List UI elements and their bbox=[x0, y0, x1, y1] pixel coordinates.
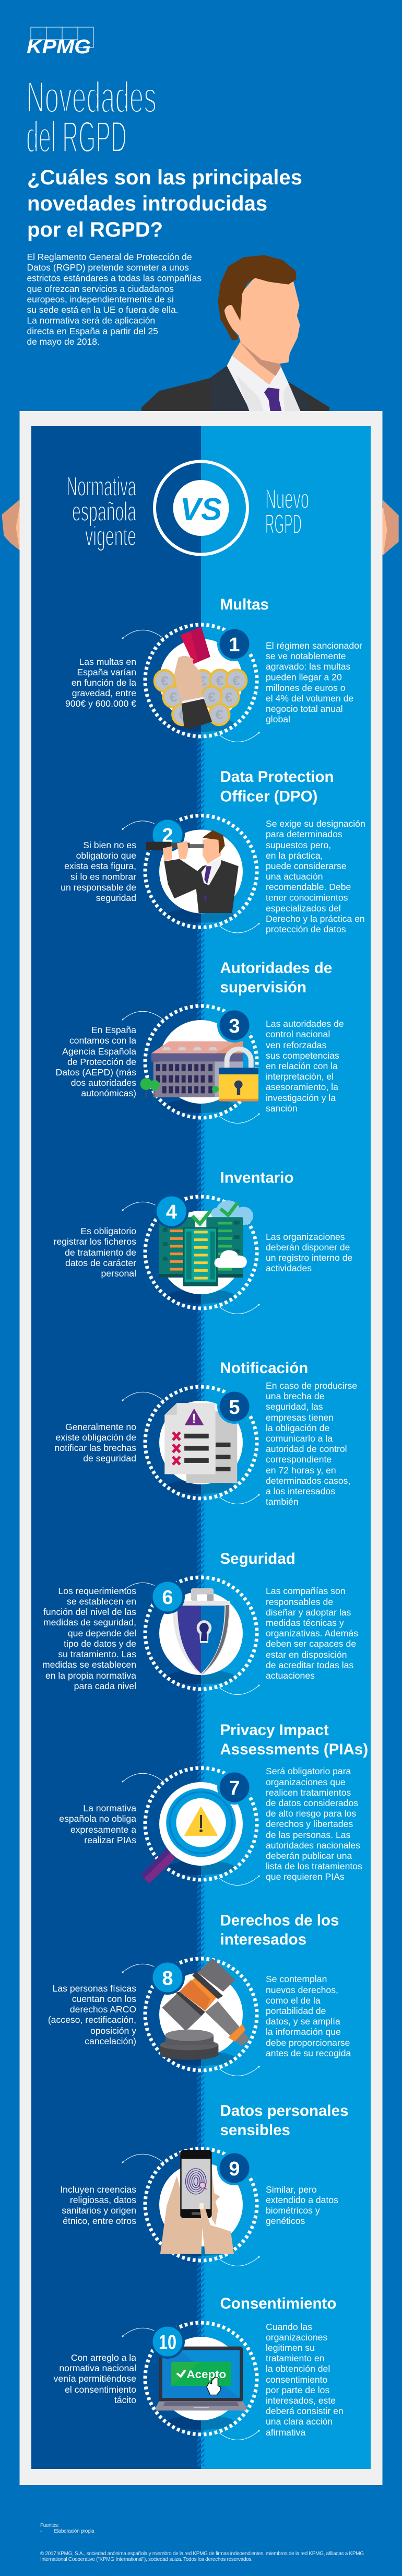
heading: Normativa española vigente: española bbox=[72, 497, 136, 527]
right text: pueden llegar a 20 bbox=[266, 672, 342, 682]
badge 3: 3 bbox=[229, 1015, 240, 1037]
left text: contamos con la bbox=[69, 1035, 136, 1046]
heading: Privacy Impact bbox=[220, 1722, 329, 1739]
heading: Normativa española vigente: vigente bbox=[85, 521, 136, 552]
KPMG logo: KPMG bbox=[27, 36, 91, 58]
section 2: Data Protection Officer bbox=[61, 768, 365, 934]
heading: Data Protection bbox=[220, 768, 334, 786]
right text: la información que bbox=[266, 2027, 341, 2037]
right text: deberán disponer de bbox=[266, 1242, 350, 1252]
intro paragraph: su sede está en la UE o fuera de ella. bbox=[27, 305, 179, 315]
right text: organizaciones que bbox=[266, 1777, 346, 1787]
footer: copyright: © 2017 KPMG, S.A., sociedad anónima española y miembro de la red KPMG de firmas independientes, miembros de la red KPMG, afiliadas a KPMG bbox=[40, 2551, 364, 2557]
right text: una actuación bbox=[266, 871, 323, 882]
heading: Notificación bbox=[220, 1360, 308, 1377]
right text: de acreditar todas las bbox=[266, 1660, 353, 1670]
right text: empresas tienen bbox=[266, 1412, 334, 1423]
left text bbox=[54, 1226, 136, 1279]
right text: el 4% del volumen de bbox=[266, 693, 353, 704]
badge 7 bbox=[217, 1770, 252, 1805]
section 6: Seguridad bbox=[42, 1550, 358, 1695]
left text: La normativa bbox=[83, 1803, 136, 1813]
right text: deben ser capaces de bbox=[266, 1638, 356, 1649]
left text bbox=[65, 657, 136, 709]
right text: un registro interno de bbox=[266, 1252, 352, 1263]
left text: de Protección de bbox=[67, 1057, 136, 1067]
left text bbox=[60, 2184, 136, 2226]
left text: autonómicas) bbox=[81, 1088, 136, 1098]
icon: building and padlock bbox=[140, 1041, 258, 1101]
badge 2: 2 bbox=[162, 825, 173, 847]
right text: interesados, este bbox=[266, 2395, 336, 2406]
intro paragraph: que ofrezcan servicios a ciudadanos bbox=[27, 284, 174, 294]
title: Novedades del RGPD: del RGPD bbox=[26, 112, 127, 161]
heading: sensibles bbox=[220, 2122, 290, 2139]
left text: Las personas físicas bbox=[53, 1983, 136, 1994]
footer: sources: Elaboración propia bbox=[54, 2528, 94, 2534]
left text: dos autoridades bbox=[71, 1078, 136, 1088]
badge 10: 10 bbox=[159, 2332, 176, 2353]
left text: tipo de datos y de bbox=[64, 1638, 136, 1649]
panel: comparison board bbox=[20, 411, 382, 2485]
intro paragraph bbox=[27, 252, 202, 347]
right text: millones de euros o bbox=[266, 683, 346, 693]
badge 5: 5 bbox=[229, 1397, 240, 1419]
left text: función del nivel de las bbox=[43, 1607, 136, 1617]
right text: sanción bbox=[266, 1103, 298, 1114]
left text: Si bien no es bbox=[83, 840, 136, 850]
right text: de las personas. Las bbox=[266, 1830, 351, 1840]
intro paragraph: El Reglamento General de Protección de bbox=[27, 252, 192, 262]
badge 1 bbox=[217, 627, 252, 661]
left text: Generalmente no bbox=[65, 1422, 136, 1432]
section 1: Multas bbox=[65, 596, 362, 742]
right text: En caso de producirse bbox=[266, 1380, 357, 1391]
right text: organizativas. Además bbox=[266, 1628, 358, 1638]
left text: que depende del bbox=[68, 1628, 136, 1638]
right text: puede considerarse bbox=[266, 861, 347, 871]
icon: documents with warning bbox=[164, 1403, 237, 1483]
left text: datos de carácter bbox=[65, 1258, 136, 1268]
left text: medidas se establecen bbox=[42, 1659, 136, 1670]
right text: ven reforzadas bbox=[266, 1040, 327, 1050]
left text: Con arreglo a la bbox=[71, 2352, 136, 2363]
right text: tratamiento en bbox=[266, 2353, 324, 2363]
right text: en 72 horas y, en bbox=[266, 1465, 336, 1476]
right text bbox=[266, 1018, 344, 1114]
right text bbox=[266, 1586, 358, 1681]
right text bbox=[266, 640, 362, 724]
left text bbox=[48, 1983, 136, 2046]
left text: oposición y bbox=[90, 2025, 136, 2036]
heading: Nuevo RGPD bbox=[265, 484, 309, 540]
icon: magnifier with warning bbox=[140, 1788, 236, 1883]
right text: en relación con la bbox=[266, 1061, 338, 1071]
right text: derechos y libertades bbox=[266, 1819, 353, 1829]
left text: Las multas en bbox=[79, 657, 136, 667]
right text: una brecha de bbox=[266, 1391, 325, 1401]
section 9: Datos personales sensibles bbox=[60, 2102, 348, 2266]
footer: copyright bbox=[40, 2551, 364, 2562]
right text: negocio total anual bbox=[266, 704, 343, 714]
section 3: Autoridades de supervisión bbox=[56, 959, 344, 1123]
right text: deberán publicar una bbox=[266, 1851, 352, 1861]
intro paragraph: estrictos estándares a todas las compañías bbox=[27, 273, 202, 283]
right text: portabilidad de bbox=[266, 2006, 326, 2016]
right text: recomendable. Debe bbox=[266, 882, 351, 892]
icon: phone with fingerprint bbox=[160, 2150, 234, 2254]
left text bbox=[42, 1586, 136, 1691]
title: Novedades del RGPD bbox=[26, 73, 157, 161]
left text: tácito bbox=[114, 2395, 136, 2405]
badge 10 bbox=[150, 2324, 185, 2359]
heading: Datos personales bbox=[220, 2102, 348, 2120]
badge 2 bbox=[150, 817, 185, 852]
right text: sus competencias bbox=[266, 1050, 339, 1061]
badge 5 bbox=[217, 1389, 252, 1424]
right text: investigación y la bbox=[266, 1093, 336, 1103]
left text: Los requerimientos bbox=[58, 1586, 136, 1596]
right text: Se contemplan bbox=[266, 1974, 327, 1984]
footer: sources bbox=[40, 2523, 94, 2534]
right text bbox=[266, 818, 365, 934]
left text: de tratamiento de bbox=[65, 1247, 136, 1258]
right text: medidas técnicas y bbox=[266, 1618, 344, 1628]
left text: Es obligatorio bbox=[80, 1226, 136, 1236]
right text: correspondiente bbox=[266, 1454, 332, 1465]
left text bbox=[54, 2352, 136, 2405]
heading: Nuevo RGPD: RGPD bbox=[265, 509, 302, 540]
left text: normativa nacional bbox=[59, 2363, 136, 2373]
intro paragraph: Datos (RGPD) pretende someter a unos bbox=[27, 262, 189, 273]
right text: también bbox=[266, 1496, 299, 1507]
left text: para cada nivel bbox=[74, 1681, 136, 1691]
left text: cancelación) bbox=[85, 2036, 136, 2046]
footer: sources: - bbox=[40, 2528, 42, 2534]
heading: Officer (DPO) bbox=[220, 788, 317, 805]
subtitle question: por el RGPD? bbox=[27, 218, 163, 241]
left text: de seguridad bbox=[83, 1453, 136, 1463]
icon: shield with keyhole bbox=[172, 1588, 230, 1676]
left text: un responsable de bbox=[61, 882, 136, 893]
right text: debe proporcionarse bbox=[266, 2038, 350, 2048]
right text: que requieren PIAs bbox=[266, 1871, 345, 1882]
right text: diseñar y adoptar las bbox=[266, 1607, 351, 1618]
right text: antes de su recogida bbox=[266, 2048, 351, 2058]
left text: existe obligación de bbox=[55, 1432, 136, 1443]
right text: control nacional bbox=[266, 1029, 330, 1039]
footer: sources: Fuentes: bbox=[40, 2523, 59, 2528]
right text: Las organizaciones bbox=[266, 1232, 345, 1242]
left text: sí lo es nombrar bbox=[70, 871, 136, 882]
right text: especializados del bbox=[266, 903, 341, 914]
intro paragraph: La normativa será de aplicación bbox=[27, 315, 155, 326]
right text: responsables de bbox=[266, 1597, 333, 1607]
footer: copyright: International Cooperative ("KPMG International"), sociedad suiza. Todos los derechos reservados. bbox=[40, 2557, 253, 2562]
right text bbox=[266, 2184, 338, 2226]
left text: religiosas, datos bbox=[70, 2195, 136, 2205]
right text: Las compañías son bbox=[266, 1586, 346, 1596]
badge 7: 7 bbox=[229, 1777, 240, 1799]
left text: cuentan con los bbox=[72, 1994, 136, 2004]
left text: obligatorio que bbox=[76, 850, 136, 861]
right text bbox=[266, 2322, 344, 2438]
left text: sanitarios y origen bbox=[62, 2205, 136, 2216]
left text: expresamente a bbox=[70, 1824, 136, 1835]
heading: Consentimiento bbox=[220, 2295, 336, 2312]
heading: interesados bbox=[220, 1931, 306, 1948]
section 7: Privacy Impact Assessments bbox=[59, 1722, 368, 1886]
subtitle question bbox=[27, 166, 302, 241]
badge 9 bbox=[217, 2151, 252, 2185]
right text: de datos considerados bbox=[266, 1798, 358, 1808]
icon: laptop with accept button bbox=[156, 2347, 246, 2410]
left text bbox=[55, 1422, 136, 1463]
right text bbox=[266, 1766, 362, 1882]
right text: Se exige su designación bbox=[266, 818, 365, 829]
left text: realizar PIAs bbox=[84, 1835, 136, 1845]
title: Novedades del RGPD: Novedades bbox=[26, 73, 157, 122]
section 10: Consentimiento bbox=[54, 2295, 344, 2440]
right text: la obtención del bbox=[266, 2363, 330, 2374]
illustration: businessman bbox=[141, 255, 329, 413]
icon: laptop with accept button: Acepto bbox=[187, 2368, 226, 2381]
right text: afirmativa bbox=[266, 2427, 305, 2438]
left text: en la propia normativa bbox=[45, 1670, 136, 1681]
right text: global bbox=[266, 714, 290, 724]
left text: su tratamiento. Las bbox=[58, 1649, 136, 1659]
icon: servers, clouds and check marks bbox=[159, 1200, 253, 1286]
right text: comunicarlo a la bbox=[266, 1433, 333, 1444]
section 4: Inventario bbox=[54, 1169, 352, 1314]
right text: la obligación de bbox=[266, 1423, 329, 1433]
heading: Inventario bbox=[220, 1169, 293, 1187]
badge 4: 4 bbox=[166, 1201, 177, 1223]
right text: deberá consistir en bbox=[266, 2406, 344, 2416]
right text: autoridades nacionales bbox=[266, 1840, 360, 1851]
right text: Será obligatorio para bbox=[266, 1766, 351, 1776]
left text: en función de la bbox=[72, 677, 136, 688]
right text: genéticos bbox=[266, 2216, 305, 2226]
right text: se ve notablemente bbox=[266, 651, 346, 661]
left text: personal bbox=[101, 1268, 136, 1279]
left text: Datos (AEPD) (más bbox=[56, 1067, 136, 1078]
left hand bbox=[2, 500, 45, 550]
intro paragraph: directa en España a partir del 25 bbox=[27, 326, 158, 336]
badge 6 bbox=[150, 1579, 185, 1614]
badge 3 bbox=[217, 1008, 252, 1043]
right text: organizaciones bbox=[266, 2332, 328, 2343]
icon: man with telescope bbox=[146, 830, 239, 913]
right text bbox=[266, 1380, 357, 1507]
badge 4 bbox=[155, 1194, 189, 1228]
right text: interpretación, el bbox=[266, 1071, 334, 1082]
right text: por parte de los bbox=[266, 2385, 329, 2395]
right text: realicen tratamientos bbox=[266, 1787, 351, 1798]
icon: gavel bbox=[160, 1959, 250, 2060]
right text: Derecho y la práctica en bbox=[266, 914, 365, 924]
left text: medidas de seguridad, bbox=[43, 1617, 136, 1627]
right text: agravado: las multas bbox=[266, 661, 351, 672]
subtitle question: ¿Cuáles son las principales bbox=[27, 166, 302, 189]
left text bbox=[56, 1025, 136, 1098]
right text bbox=[266, 1974, 351, 2058]
left text: registrar los ficheros bbox=[54, 1236, 136, 1247]
right text: lista de los tratamientos bbox=[266, 1861, 362, 1871]
badge 1: 1 bbox=[229, 634, 240, 656]
left text: étnico, entre otros bbox=[63, 2216, 136, 2226]
heading: Autoridades de bbox=[220, 959, 332, 977]
right text: Las autoridades de bbox=[266, 1018, 344, 1029]
badge 8: 8 bbox=[162, 1968, 173, 1989]
right text: biométricos y bbox=[266, 2205, 320, 2216]
right text: una clara acción bbox=[266, 2416, 333, 2427]
left text: exista esta figura, bbox=[64, 861, 136, 871]
left text: En España bbox=[91, 1025, 136, 1035]
right hand bbox=[354, 500, 399, 555]
icon: red card, hand and coins bbox=[153, 627, 247, 729]
subtitle question: novedades introducidas bbox=[27, 192, 267, 215]
left text bbox=[61, 840, 136, 903]
right text: legitimen su bbox=[266, 2343, 315, 2353]
right text bbox=[266, 1232, 352, 1273]
left text: España varían bbox=[77, 667, 136, 677]
left text: seguridad bbox=[96, 893, 136, 903]
right text: El régimen sancionador bbox=[266, 640, 362, 651]
left text: Incluyen creencias bbox=[60, 2184, 136, 2195]
right text: Similar, pero bbox=[266, 2184, 317, 2195]
left text: venía permitiéndose bbox=[54, 2373, 136, 2384]
right text: datos, y se amplía bbox=[266, 2016, 340, 2027]
section 8: Derechos de los interesados bbox=[48, 1912, 351, 2076]
right text: seguridad, las bbox=[266, 1401, 323, 1412]
right text: consentimiento bbox=[266, 2374, 328, 2385]
intro paragraph: europeos, independientemente de si bbox=[27, 294, 174, 305]
right text: actuaciones bbox=[266, 1670, 315, 1681]
badge 9: 9 bbox=[229, 2158, 240, 2180]
right text: autoridad de control bbox=[266, 1444, 347, 1454]
KPMG logo bbox=[27, 27, 93, 58]
right text: supuestos pero, bbox=[266, 840, 331, 850]
left text bbox=[59, 1803, 136, 1845]
heading: Assessments (PIAs) bbox=[220, 1741, 368, 1758]
left text: 900€ y 600.000 € bbox=[65, 698, 136, 709]
right text: a los interesados bbox=[266, 1486, 335, 1496]
VS badge: VS bbox=[180, 492, 222, 526]
right text: extendido a datos bbox=[266, 2195, 338, 2205]
heading: Derechos de los bbox=[220, 1912, 339, 1929]
heading: Nuevo RGPD: Nuevo bbox=[265, 484, 309, 514]
left text: derechos ARCO bbox=[70, 2004, 136, 2015]
heading: Normativa española vigente bbox=[66, 472, 136, 552]
heading: Seguridad bbox=[220, 1550, 295, 1567]
heading: Multas bbox=[220, 596, 269, 613]
right text: asesoramiento, la bbox=[266, 1082, 338, 1092]
right text: para determinados bbox=[266, 829, 342, 839]
right text: de alto riesgo para los bbox=[266, 1808, 356, 1819]
left text: española no obliga bbox=[59, 1813, 136, 1824]
right text: actividades bbox=[266, 1263, 312, 1273]
VS badge bbox=[155, 462, 247, 555]
right text: Cuando las bbox=[266, 2322, 312, 2332]
right text: nuevos derechos, bbox=[266, 1985, 338, 1995]
left text: gravedad, entre bbox=[72, 688, 136, 698]
badge 8 bbox=[150, 1960, 185, 1995]
left text: notificar las brechas bbox=[55, 1443, 136, 1453]
section 5: Notificación bbox=[55, 1360, 357, 1507]
heading: supervisión bbox=[220, 979, 306, 996]
left text: (acceso, rectificación, bbox=[48, 2015, 136, 2025]
heading: Normativa española vigente: Normativa bbox=[66, 472, 136, 502]
right text: protección de datos bbox=[266, 924, 346, 934]
right text: tener conocimientos bbox=[266, 892, 348, 903]
right text: como el de la bbox=[266, 1995, 321, 2006]
right text: determinados casos, bbox=[266, 1476, 350, 1486]
right text: en la práctica, bbox=[266, 850, 323, 861]
left text: Agencia Española bbox=[62, 1046, 136, 1057]
left text: se establecen en bbox=[67, 1596, 136, 1607]
left text: el consentimiento bbox=[65, 2384, 136, 2395]
right text: estar en disposición bbox=[266, 1649, 347, 1660]
badge 6: 6 bbox=[162, 1587, 173, 1609]
intro paragraph: de mayo de 2018. bbox=[27, 336, 100, 347]
